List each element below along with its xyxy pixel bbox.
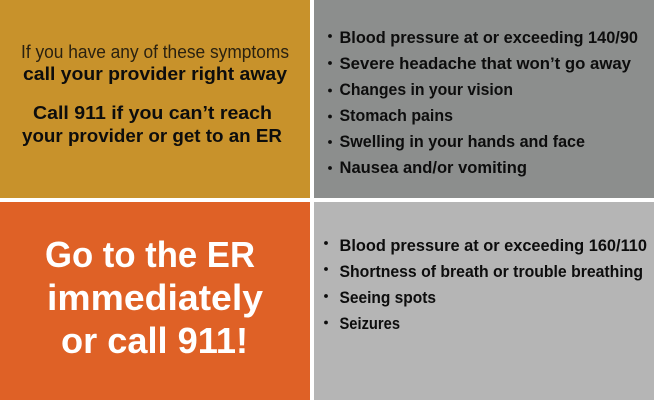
text: call 911 instruction: Call 911 if you can’t reach xyxy=(33,102,272,123)
list item: shortness of breath: Shortness of breath or trouble breathing xyxy=(340,263,643,281)
list item: severe headache: Severe headache that won’t go away xyxy=(340,55,632,73)
list item: blood pressure 160/110: Blood pressure at or exceeding 160/110 xyxy=(340,237,647,255)
heading: go to the ER immediately: immediately xyxy=(47,277,263,318)
text: symptoms intro: If you have any of these symptoms xyxy=(21,42,289,62)
heading: go to the ER immediately: Go to the ER xyxy=(45,234,255,275)
list item: seeing spots: Seeing spots xyxy=(340,289,436,307)
text: call 911 instruction: your provider or get to an ER xyxy=(22,125,282,146)
heading: go to the ER immediately xyxy=(45,234,263,361)
panel: emergency symptoms list xyxy=(314,202,654,400)
list item: seizures: Seizures xyxy=(340,315,400,333)
heading: go to the ER immediately: or call 911! xyxy=(61,320,248,361)
list item: nausea: Nausea and/or vomiting xyxy=(340,159,527,177)
panel: go to the ER xyxy=(0,202,310,400)
panel: provider symptoms list xyxy=(314,0,654,198)
list item: vision changes: Changes in your vision xyxy=(340,81,513,99)
list item: blood pressure 140/90: Blood pressure at or exceeding 140/90 xyxy=(340,29,638,47)
text: call 911 instruction xyxy=(22,102,282,146)
list item: swelling: Swelling in your hands and face xyxy=(340,133,585,151)
list item: stomach pains: Stomach pains xyxy=(340,107,453,125)
panel: call your provider xyxy=(0,0,310,198)
heading: call your provider right away: call your provider right away xyxy=(23,63,288,84)
